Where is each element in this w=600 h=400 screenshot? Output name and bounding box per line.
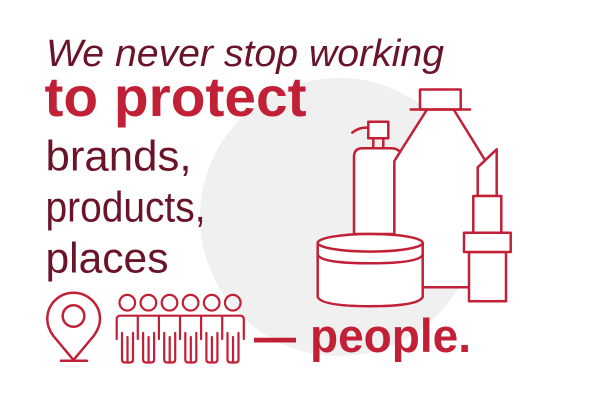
legs bbox=[122, 333, 238, 362]
icon: lipstick bbox=[464, 149, 511, 301]
heads bbox=[120, 295, 241, 311]
icon: pump bottle bbox=[352, 122, 400, 234]
icon: large bottle bbox=[394, 90, 484, 287]
icon: row of six people bbox=[117, 295, 244, 362]
heading: We never stop working: We never stop working bbox=[46, 33, 444, 75]
icon: location pin bbox=[47, 293, 100, 361]
text: brands: brands, bbox=[46, 133, 192, 181]
shoulders and arms bbox=[117, 316, 244, 339]
text: dash: — bbox=[254, 311, 296, 364]
text: products: products, bbox=[46, 184, 206, 232]
heading: to protect: to protect bbox=[44, 65, 306, 128]
background circle bbox=[200, 78, 478, 356]
icon: cream jar bbox=[318, 234, 423, 306]
text: places: places bbox=[46, 235, 168, 283]
text: people: people. bbox=[310, 309, 471, 362]
icon: product group bbox=[318, 90, 511, 306]
